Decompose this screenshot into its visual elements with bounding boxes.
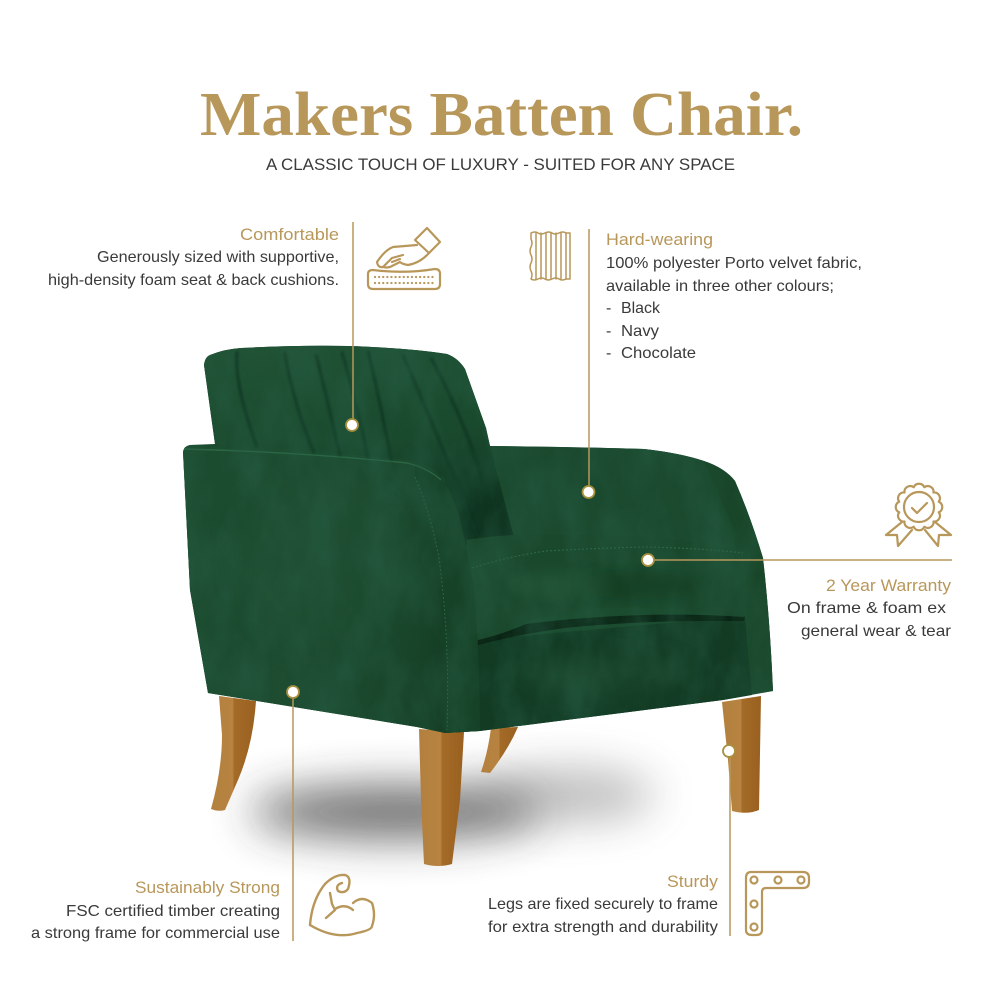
subtitle: A CLASSIC TOUCH OF LUXURY - SUITED FOR ANY SPACE xyxy=(266,155,735,174)
text block: comfortable: high-density foam seat & back cushions. xyxy=(48,272,339,289)
callout: sturdy leader xyxy=(723,745,735,936)
chair illustration xyxy=(180,340,780,866)
text block: comfortable: Generously sized with supportive, xyxy=(97,249,339,266)
text block: hard-wearing: - xyxy=(606,345,611,362)
chair body base xyxy=(183,346,773,733)
chair right arm inner xyxy=(490,446,735,560)
text block: warranty: 2 Year Warranty xyxy=(826,576,951,595)
text block: hard-wearing: available in three other colours; xyxy=(606,278,834,295)
text block: warranty: On frame & foam ex xyxy=(787,600,946,617)
icon: corner bracket xyxy=(746,872,809,935)
text block: sturdy: for extra strength and durability xyxy=(488,919,718,936)
text block: warranty: general wear & tear xyxy=(801,623,952,640)
text block: hard-wearing: - xyxy=(606,323,611,340)
text block: hard-wearing: - xyxy=(606,300,611,317)
chair seat gap shadow xyxy=(478,615,745,645)
text block: sustainably strong xyxy=(31,878,280,942)
icon: flexed arm xyxy=(310,875,374,935)
velvet texture xyxy=(180,340,780,740)
text block: warranty xyxy=(787,576,952,640)
chair back xyxy=(204,346,514,545)
text block: sturdy xyxy=(488,872,719,936)
text block: comfortable xyxy=(48,225,339,289)
text block: comfortable: Comfortable xyxy=(240,225,339,244)
icon: hand pressing foam xyxy=(368,228,440,289)
callout: strong leader xyxy=(287,686,299,941)
text block: hard-wearing xyxy=(606,230,862,362)
text block: sturdy: Legs are fixed securely to frame xyxy=(488,896,718,913)
callout: warranty leader xyxy=(642,554,952,566)
chair left arm xyxy=(183,445,480,733)
text block: sustainably strong: FSC certified timber creating xyxy=(66,903,280,920)
text block: hard-wearing: Black xyxy=(621,300,661,317)
text block: hard-wearing: 100% polyester Porto velvet fabric, xyxy=(606,255,862,272)
callout: comfortable leader xyxy=(346,222,358,431)
chair back channels xyxy=(237,351,490,537)
callout: hard-wearing leader xyxy=(582,229,594,498)
text block: sustainably strong: a strong frame for commercial use xyxy=(31,925,280,942)
chair front skirt xyxy=(476,616,752,731)
icon: warranty badge xyxy=(886,484,951,546)
chair right arm front xyxy=(704,461,773,694)
chair seat cushion xyxy=(466,535,747,640)
floor shadow xyxy=(250,769,655,838)
chair legs xyxy=(211,696,761,866)
text block: hard-wearing: Chocolate xyxy=(621,345,696,362)
text block: hard-wearing: Navy xyxy=(621,323,659,340)
text block: hard-wearing: Hard-wearing xyxy=(606,230,713,249)
text block: sustainably strong: Sustainably Strong xyxy=(135,878,280,897)
text block: sturdy: Sturdy xyxy=(667,872,719,891)
icon: fabric swatch xyxy=(530,232,570,280)
title: Makers Batten Chair. xyxy=(200,81,803,149)
